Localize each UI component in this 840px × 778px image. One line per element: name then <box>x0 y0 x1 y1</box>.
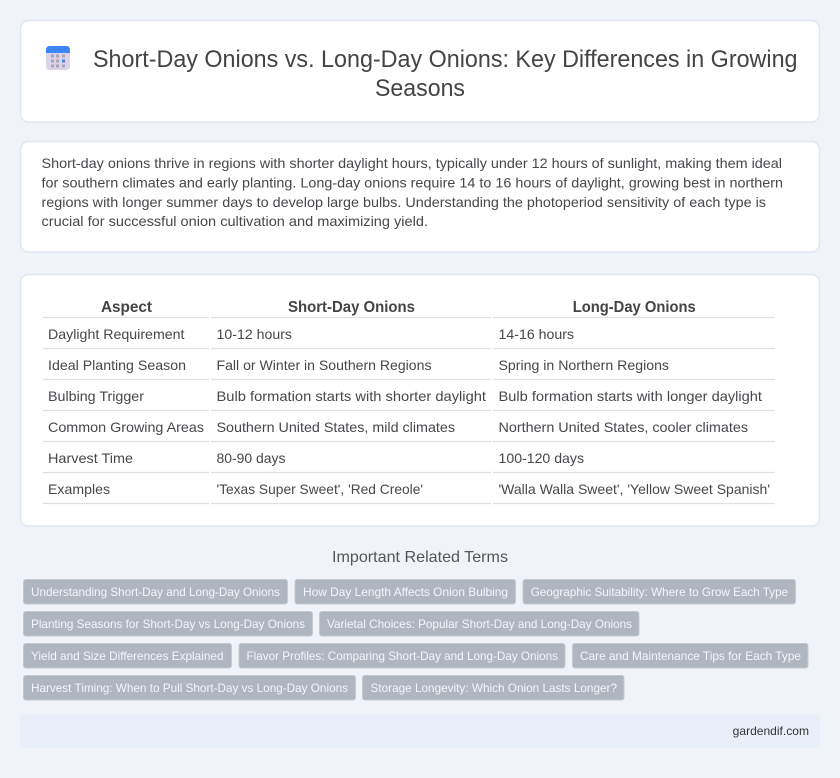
title <box>93 46 798 102</box>
row: examples: Examples <box>48 481 110 497</box>
tag: Flavor Profiles: Comparing Short-Day and Long-Day Onions <box>246 649 558 663</box>
footer bar <box>20 714 820 748</box>
icon: calendar <box>46 46 70 70</box>
row: common growing areas: Common Growing Areas <box>48 419 204 435</box>
row: bulbing trigger: Bulb formation starts with longer daylight <box>498 388 762 404</box>
intro text: Short-day onions thrive in regions with shorter daylight hours, typically under 12 hours of sunlight, making them ideal <box>42 155 782 171</box>
row: ideal planting season <box>48 357 669 373</box>
intro text <box>42 155 783 229</box>
tag <box>295 580 516 604</box>
row: daylight requirement: 14-16 hours <box>498 326 574 342</box>
tag: Harvest Timing: When to Pull Short-Day vs Long-Day Onions <box>31 681 348 695</box>
tag <box>362 676 624 700</box>
footer source: gardendif.com <box>733 724 809 738</box>
tag: Planting Seasons for Short-Day vs Long-Day Onions <box>31 617 305 631</box>
tag: Understanding Short-Day and Long-Day Onions <box>31 585 280 599</box>
row: ideal planting season: Spring in Northern Regions <box>498 357 669 373</box>
table header row <box>101 299 696 316</box>
intro text: regions with longer summer days to develop large bulbs. Understanding the photoperiod sensitivity of each type is <box>42 194 766 210</box>
table header row: Short-Day Onions <box>288 299 415 316</box>
tag: How Day Length Affects Onion Bulbing <box>303 585 508 599</box>
tag <box>572 644 808 668</box>
panel: comparison table <box>20 274 820 526</box>
heading: important related terms: Important Related Terms <box>332 549 508 566</box>
panel: introduction <box>20 142 820 252</box>
row: daylight requirement: Daylight Requirement <box>48 326 185 342</box>
tag: Geographic Suitability: Where to Grow Each Type <box>531 585 789 599</box>
related term tags <box>24 580 808 700</box>
row: common growing areas: Southern United States, mild climates <box>216 419 455 435</box>
tag <box>24 644 232 668</box>
tag: Yield and Size Differences Explained <box>31 649 224 663</box>
intro text: crucial for successful onion cultivation and maximizing yield. <box>42 213 428 229</box>
tag: Care and Maintenance Tips for Each Type <box>580 649 801 663</box>
row: examples: 'Texas Super Sweet', 'Red Creole' <box>216 481 423 497</box>
tag <box>24 580 288 604</box>
table header row: Aspect <box>101 299 152 316</box>
row: ideal planting season: Ideal Planting Season <box>48 357 186 373</box>
row: daylight requirement <box>48 326 574 342</box>
row: harvest time <box>48 450 584 466</box>
row: examples: 'Walla Walla Sweet', 'Yellow Sweet Spanish' <box>498 481 770 497</box>
tag <box>239 644 565 668</box>
tag <box>24 612 312 636</box>
panel: header <box>20 20 820 122</box>
row: bulbing trigger: Bulbing Trigger <box>48 388 144 404</box>
title: Short-Day Onions vs. Long-Day Onions: Key Differences in Growing <box>93 46 798 73</box>
row: common growing areas: Northern United States, cooler climates <box>498 419 748 435</box>
row: examples <box>48 481 770 497</box>
tag <box>24 676 356 700</box>
row: harvest time: Harvest Time <box>48 450 133 466</box>
row: daylight requirement: 10-12 hours <box>216 326 292 342</box>
row: ideal planting season: Fall or Winter in Southern Regions <box>216 357 432 373</box>
row: harvest time: 80-90 days <box>216 450 286 466</box>
intro text: for southern climates and early planting. Long-day onions require 14 to 16 hours of daylight, growing best in northern <box>42 174 783 190</box>
row: bulbing trigger: Bulb formation starts with shorter daylight <box>216 388 486 404</box>
row: harvest time: 100-120 days <box>498 450 584 466</box>
table header row: Long-Day Onions <box>573 299 696 316</box>
tag <box>320 612 639 636</box>
row: common growing areas <box>48 419 748 435</box>
tag: Varietal Choices: Popular Short-Day and Long-Day Onions <box>327 617 632 631</box>
title: Seasons <box>375 75 465 102</box>
row: bulbing trigger <box>48 388 762 404</box>
tag <box>523 580 796 604</box>
tag: Storage Longevity: Which Onion Lasts Longer? <box>370 681 617 695</box>
